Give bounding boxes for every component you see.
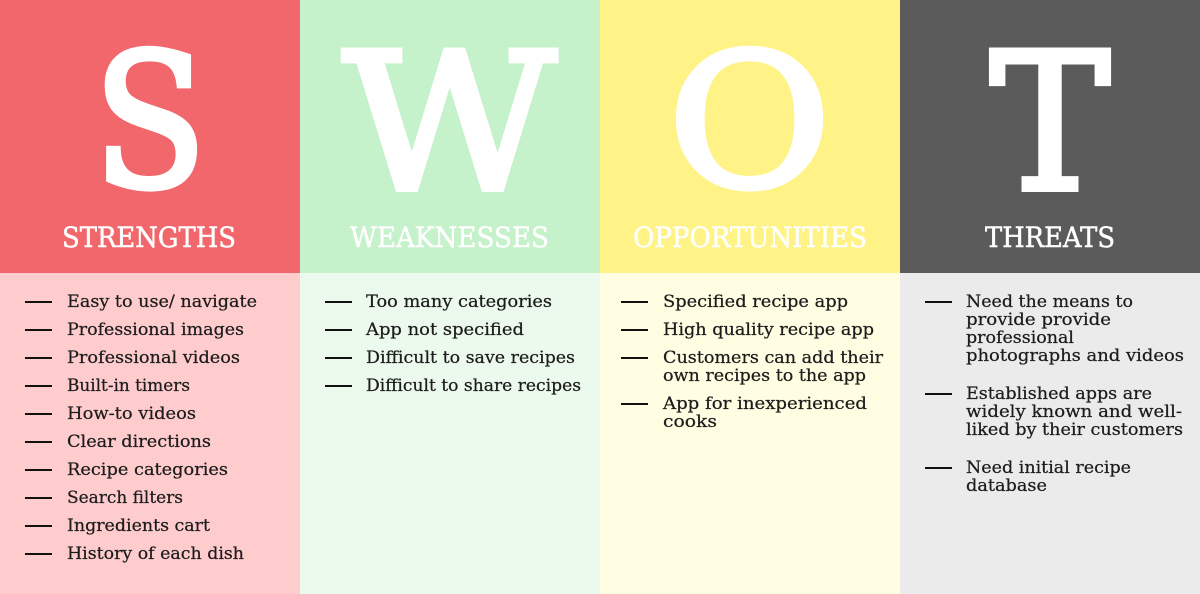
heading: opportunities: OPPORTUNITIES	[633, 221, 867, 254]
list: strengths items: Ingredients cart	[67, 516, 210, 536]
list: strengths items: Easy to use/ navigate	[67, 292, 257, 312]
list: strengths items: Search filters	[67, 488, 183, 508]
panel: strengths	[0, 0, 300, 594]
list: strengths items	[25, 292, 257, 564]
list: threats items: photographs and videos	[966, 346, 1184, 366]
big letter S: S	[94, 14, 206, 230]
list: weaknesses items: App not specified	[365, 320, 524, 340]
list: threats items: widely known and well-	[966, 402, 1182, 422]
list: opportunities items: App for inexperienced	[662, 394, 867, 414]
list: threats items: Need initial recipe	[966, 458, 1131, 478]
list: threats items: liked by their customers	[966, 420, 1183, 440]
list: opportunities items: cooks	[663, 412, 717, 432]
list: opportunities items: own recipes to the app	[663, 366, 866, 386]
list: threats items: Need the means to	[966, 292, 1133, 312]
list: weaknesses items: Difficult to share recipes	[366, 376, 581, 396]
list: strengths items: History of each dish	[67, 544, 244, 564]
panel: weaknesses	[300, 0, 600, 594]
list: strengths items: Built-in timers	[67, 376, 190, 396]
list: strengths items: Professional videos	[67, 348, 240, 368]
big letter O: O	[668, 14, 831, 230]
list: threats items: professional	[966, 328, 1074, 348]
list: opportunities items: Specified recipe app	[663, 292, 848, 312]
big letter W: W	[343, 13, 556, 234]
list: opportunities items: Customers can add their	[663, 348, 884, 368]
heading: threats: THREATS	[985, 221, 1115, 254]
list: strengths items: Professional images	[67, 320, 244, 340]
list: strengths items: Recipe categories	[67, 460, 228, 480]
list: threats items: database	[966, 476, 1047, 496]
heading: strengths: STRENGTHS	[62, 221, 236, 254]
panel: opportunities	[600, 0, 900, 594]
list: threats items: provide provide	[966, 310, 1111, 330]
list: opportunities items: High quality recipe app	[663, 320, 874, 340]
panel: threats	[900, 0, 1200, 594]
list: strengths items: How-to videos	[67, 404, 196, 424]
big letter T: T	[990, 13, 1110, 234]
list: threats items	[925, 292, 1184, 496]
list: weaknesses items: Too many categories	[366, 292, 552, 312]
list: threats items: Established apps are	[966, 384, 1152, 404]
list: weaknesses items	[325, 292, 581, 396]
list: opportunities items	[621, 292, 884, 432]
list: strengths items: Clear directions	[67, 432, 211, 452]
list: weaknesses items: Difficult to save recipes	[366, 348, 575, 368]
heading: weaknesses: WEAKNESSES	[350, 221, 549, 254]
